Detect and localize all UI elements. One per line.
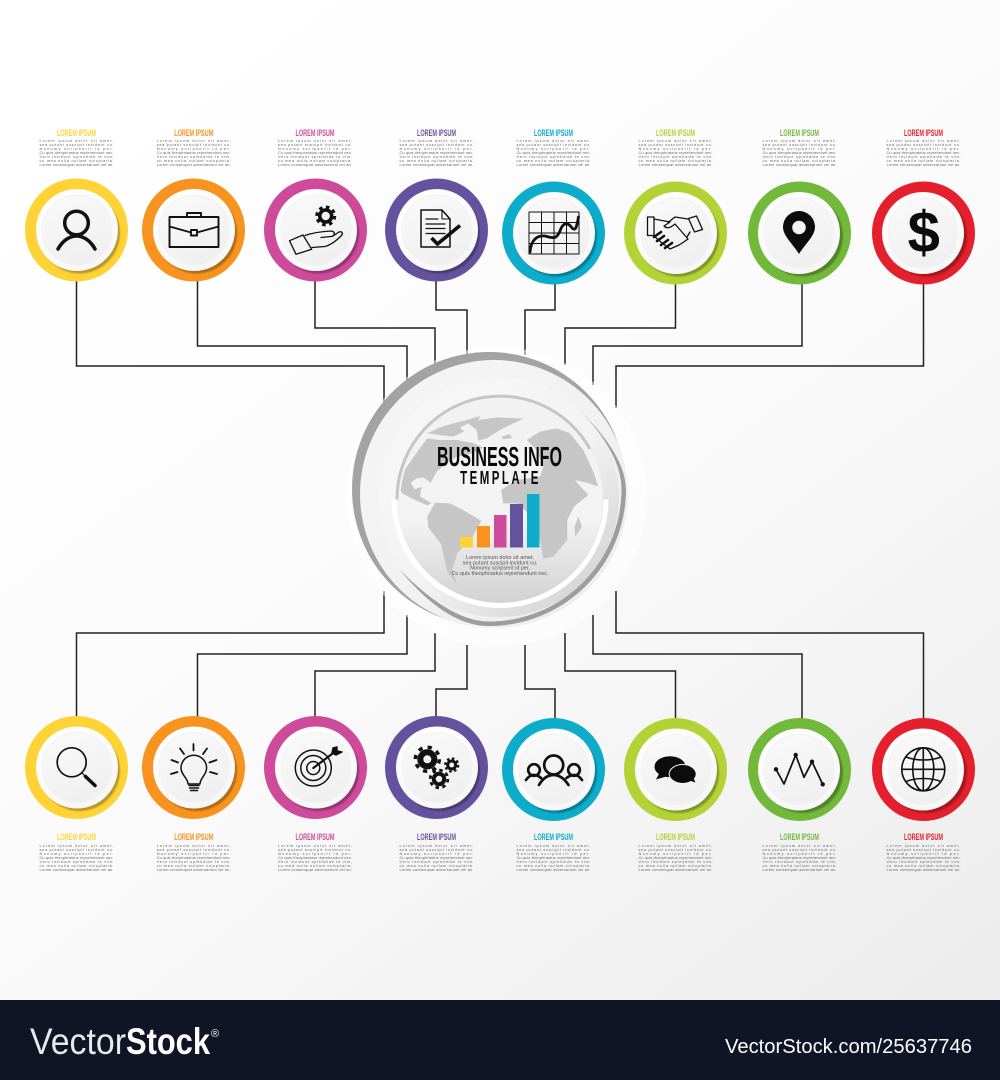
text block top 6: Nonumy scripserit id per. xyxy=(638,146,712,151)
icon: document with check xyxy=(421,210,460,247)
text block bottom 6: cu mea nulla nullam voluptaria. xyxy=(638,863,712,868)
text block top 7: Lorem ipsum dolor sit amet, xyxy=(762,138,836,143)
text block bottom 7: Nonumy scripserit id per. xyxy=(762,851,836,856)
icon: speech bubbles xyxy=(654,756,696,784)
text block bottom 7: LOREM IPSUM xyxy=(780,832,819,842)
text block top 7 xyxy=(762,128,836,167)
hub description: sea putant suscipit invidunt cu. xyxy=(462,560,538,566)
text block bottom 5: Nonumy scripserit id per. xyxy=(516,851,590,856)
text block top 1: Cu quis theophrastus reprehendunt nec. xyxy=(40,150,114,155)
badge: handshake xyxy=(624,182,727,284)
text block top 6: LOREM IPSUM xyxy=(656,128,695,138)
text block top 2: Cu quis theophrastus reprehendunt nec. xyxy=(157,150,231,155)
text block bottom 5: Lorem ipsum dolor sit amet, xyxy=(516,843,590,848)
text block top 8: Cu quis theophrastus reprehendunt nec. xyxy=(886,150,960,155)
badge: person xyxy=(25,178,128,282)
footer logo: Stock xyxy=(126,1021,210,1062)
text block top 2: LOREM IPSUM xyxy=(174,128,213,138)
icon: map pin xyxy=(783,211,815,254)
text block bottom 3: cu mea nulla nullam voluptaria. xyxy=(278,863,352,868)
icon: target with arrow xyxy=(295,747,342,786)
text block bottom 6: Lorem ipsum dolor sit amet, xyxy=(638,843,712,848)
text block bottom 2: sea putant suscipit invidunt cu. xyxy=(157,847,231,852)
text block bottom 3: Nonumy scripserit id per. xyxy=(278,851,352,856)
text block top 4 xyxy=(400,128,474,167)
text block bottom 4 xyxy=(400,832,474,872)
text block top 1: Vero invidunt splendide te vim, xyxy=(40,154,114,159)
badge: magnifier xyxy=(25,716,128,819)
text block top 7: sea putant suscipit invidunt cu. xyxy=(762,142,836,147)
text block bottom 3: LOREM IPSUM xyxy=(296,832,334,842)
text block top 8 xyxy=(886,128,960,167)
text block top 6: Vero invidunt splendide te vim, xyxy=(638,154,712,159)
text block top 1 xyxy=(40,128,114,167)
text block bottom 3: sea putant suscipit invidunt cu. xyxy=(278,847,352,852)
text block bottom 3 xyxy=(278,832,352,872)
text block bottom 8: sea putant suscipit invidunt cu. xyxy=(886,847,960,852)
badge: light bulb xyxy=(142,716,245,819)
text block top 3: Vero invidunt splendide te vim, xyxy=(278,154,352,159)
text block bottom 4: Vero invidunt splendide te vim, xyxy=(400,859,474,864)
text block bottom 7: sea putant suscipit invidunt cu. xyxy=(762,847,836,852)
text block top 3: LOREM IPSUM xyxy=(296,128,334,138)
hub description: Lorem ipsum dolor sit amet, xyxy=(466,555,535,561)
text block top 1: Nonumy scripserit id per. xyxy=(40,146,114,151)
badge: briefcase xyxy=(142,178,245,282)
footer logo xyxy=(30,1021,219,1062)
text block top 5: sea putant suscipit invidunt cu. xyxy=(516,142,590,147)
text block top 5: Lorem ipsum dolor sit amet, xyxy=(516,138,590,143)
text block bottom 3: Lorem ipsum dolor sit amet, xyxy=(278,843,352,848)
central hub xyxy=(352,350,628,634)
text block bottom 4: LOREM IPSUM xyxy=(417,832,456,842)
text block top 5: Nonumy scripserit id per. xyxy=(516,146,590,151)
text block top 2: Lorem consenquat adversarium vel an. xyxy=(157,162,231,167)
text block top 2: Nonumy scripserit id per. xyxy=(157,146,231,151)
text block top 1: Lorem consenquat adversarium vel an. xyxy=(40,162,114,167)
text block top 7: cu mea nulla nullam voluptaria. xyxy=(762,158,836,163)
icon: handshake xyxy=(648,216,702,249)
text block top 8: LOREM IPSUM xyxy=(904,128,943,138)
text block top 2: sea putant suscipit invidunt cu. xyxy=(157,142,231,147)
text block top 4: cu mea nulla nullam voluptaria. xyxy=(400,158,474,163)
text block bottom 3: Cu quis theophrastus reprehendunt nec. xyxy=(278,855,352,860)
text block bottom 8: Cu quis theophrastus reprehendunt nec. xyxy=(886,855,960,860)
text block bottom 7: cu mea nulla nullam voluptaria. xyxy=(762,863,836,868)
text block bottom 5: Lorem consenquat adversarium vel an. xyxy=(516,867,590,872)
text block bottom 1: Lorem ipsum dolor sit amet, xyxy=(40,843,114,848)
badge: speech bubbles xyxy=(624,718,727,821)
text block bottom 7 xyxy=(762,832,836,872)
text block bottom 5 xyxy=(516,832,590,872)
text block bottom 6: LOREM IPSUM xyxy=(656,832,695,842)
text block bottom 6: Nonumy scripserit id per. xyxy=(638,851,712,856)
text block bottom 8: LOREM IPSUM xyxy=(904,832,943,842)
text block bottom 2: cu mea nulla nullam voluptaria. xyxy=(157,863,231,868)
text block top 5: LOREM IPSUM xyxy=(534,128,573,138)
text block bottom 8 xyxy=(886,832,960,872)
text block bottom 7: Lorem ipsum dolor sit amet, xyxy=(762,843,836,848)
badge: chart xyxy=(502,182,605,284)
icon: gear xyxy=(317,207,335,225)
text block top 2: Lorem ipsum dolor sit amet, xyxy=(157,138,231,143)
badge: globe xyxy=(872,718,975,821)
text block bottom 1: LOREM IPSUM xyxy=(57,832,96,842)
text block top 8: Nonumy scripserit id per. xyxy=(886,146,960,151)
text block top 8: sea putant suscipit invidunt cu. xyxy=(886,142,960,147)
text block top 4: LOREM IPSUM xyxy=(417,128,456,138)
hub description: Cu quis theophrastus reprehendunt nec. xyxy=(452,571,548,577)
text block bottom 1: Nonumy scripserit id per. xyxy=(40,851,114,856)
text block top 5: Vero invidunt splendide te vim, xyxy=(516,154,590,159)
icon: light bulb xyxy=(171,744,217,790)
text block bottom 4: Lorem ipsum dolor sit amet, xyxy=(400,843,474,848)
text block top 8: Lorem ipsum dolor sit amet, xyxy=(886,138,960,143)
text block bottom 6: Cu quis theophrastus reprehendunt nec. xyxy=(638,855,712,860)
text block bottom 4: Nonumy scripserit id per. xyxy=(400,851,474,856)
text block bottom 6: Lorem consenquat adversarium vel an. xyxy=(638,867,712,872)
text block top 6: Lorem ipsum dolor sit amet, xyxy=(638,138,712,143)
title: BUSINESS INFO xyxy=(437,441,562,472)
text block bottom 2 xyxy=(157,832,231,872)
text block top 4: Lorem ipsum dolor sit amet, xyxy=(400,138,474,143)
icon: hand xyxy=(290,231,342,254)
text block bottom 1: cu mea nulla nullam voluptaria. xyxy=(40,863,114,868)
subtitle: TEMPLATE xyxy=(460,468,541,489)
text block top 4: sea putant suscipit invidunt cu. xyxy=(400,142,474,147)
text block bottom 5: sea putant suscipit invidunt cu. xyxy=(516,847,590,852)
text block bottom 1: sea putant suscipit invidunt cu. xyxy=(40,847,114,852)
icon: person xyxy=(58,211,95,249)
text block top 8: Vero invidunt splendide te vim, xyxy=(886,154,960,159)
text block top 7: Vero invidunt splendide te vim, xyxy=(762,154,836,159)
text block top 3: Cu quis theophrastus reprehendunt nec. xyxy=(278,150,352,155)
text block bottom 8: Lorem ipsum dolor sit amet, xyxy=(886,843,960,848)
text block top 3: Lorem ipsum dolor sit amet, xyxy=(278,138,352,143)
text block bottom 7: Cu quis theophrastus reprehendunt nec. xyxy=(762,855,836,860)
text block bottom 8: Vero invidunt splendide te vim, xyxy=(886,859,960,864)
text block top 6: cu mea nulla nullam voluptaria. xyxy=(638,158,712,163)
badge: hand with gear xyxy=(264,178,367,282)
text block bottom 4: Lorem consenquat adversarium vel an. xyxy=(400,867,474,872)
badge: gears xyxy=(385,716,488,819)
text block bottom 3: Lorem consenquat adversarium vel an. xyxy=(278,867,352,872)
text block bottom 8: Nonumy scripserit id per. xyxy=(886,851,960,856)
text block top 4: Vero invidunt splendide te vim, xyxy=(400,154,474,159)
text block bottom 1: Vero invidunt splendide te vim, xyxy=(40,859,114,864)
text block top 5: Cu quis theophrastus reprehendunt nec. xyxy=(516,150,590,155)
icon: gears xyxy=(415,747,458,788)
text block bottom 1: Lorem consenquat adversarium vel an. xyxy=(40,867,114,872)
bar chart xyxy=(460,494,540,548)
text block bottom 7: Vero invidunt splendide te vim, xyxy=(762,859,836,864)
text block bottom 8: cu mea nulla nullam voluptaria. xyxy=(886,863,960,868)
text block top 2: Vero invidunt splendide te vim, xyxy=(157,154,231,159)
text block top 4: Lorem consenquat adversarium vel an. xyxy=(400,162,474,167)
text block bottom 1: Cu quis theophrastus reprehendunt nec. xyxy=(40,855,114,860)
text block bottom 4: cu mea nulla nullam voluptaria. xyxy=(400,863,474,868)
icon: briefcase xyxy=(170,213,218,247)
footer logo: Vector xyxy=(30,1021,126,1062)
text block bottom 4: Cu quis theophrastus reprehendunt nec. xyxy=(400,855,474,860)
hub description: Nonumy scripserit id per. xyxy=(470,566,530,572)
text block bottom 2: Lorem ipsum dolor sit amet, xyxy=(157,843,231,848)
badge: target xyxy=(264,716,367,819)
text block top 3 xyxy=(278,128,352,167)
text block top 3: Nonumy scripserit id per. xyxy=(278,146,352,151)
text block bottom 7: Lorem consenquat adversarium vel an. xyxy=(762,867,836,872)
text block top 1: LOREM IPSUM xyxy=(57,128,96,138)
icon: line chart grid xyxy=(529,212,579,254)
text block top 8: Lorem consenquat adversarium vel an. xyxy=(886,162,960,167)
connector lines xyxy=(76,280,924,720)
text block top 5: cu mea nulla nullam voluptaria. xyxy=(516,158,590,163)
globe map xyxy=(395,416,598,585)
text block bottom 6: sea putant suscipit invidunt cu. xyxy=(638,847,712,852)
text block bottom 5: cu mea nulla nullam voluptaria. xyxy=(516,863,590,868)
text block top 6: Lorem consenquat adversarium vel an. xyxy=(638,162,712,167)
icon: magnifier xyxy=(57,748,95,786)
footer url: VectorStock.com/25637746 xyxy=(725,1036,972,1058)
footer logo: ® xyxy=(211,1028,219,1040)
text block top 5 xyxy=(516,128,590,167)
text block top 2 xyxy=(157,128,231,167)
text block top 7: Cu quis theophrastus reprehendunt nec. xyxy=(762,150,836,155)
text block bottom 1 xyxy=(40,832,114,872)
badge: people xyxy=(502,718,605,821)
text block top 2: cu mea nulla nullam voluptaria. xyxy=(157,158,231,163)
badge: map pin xyxy=(748,182,851,284)
text block top 4: Nonumy scripserit id per. xyxy=(400,146,474,151)
footer bar xyxy=(0,1000,1000,1080)
text block top 1: Lorem ipsum dolor sit amet, xyxy=(40,138,114,143)
text block top 6 xyxy=(638,128,712,167)
badge: zigzag line xyxy=(748,718,851,821)
text block top 1: sea putant suscipit invidunt cu. xyxy=(40,142,114,147)
text block top 8: cu mea nulla nullam voluptaria. xyxy=(886,158,960,163)
text block bottom 6: Vero invidunt splendide te vim, xyxy=(638,859,712,864)
text block top 3: sea putant suscipit invidunt cu. xyxy=(278,142,352,147)
text block bottom 2: Lorem consenquat adversarium vel an. xyxy=(157,867,231,872)
text block top 7: Lorem consenquat adversarium vel an. xyxy=(762,162,836,167)
text block bottom 8: Lorem consenquat adversarium vel an. xyxy=(886,867,960,872)
badge: document xyxy=(385,178,488,282)
text block top 6: Cu quis theophrastus reprehendunt nec. xyxy=(638,150,712,155)
text block top 1: cu mea nulla nullam voluptaria. xyxy=(40,158,114,163)
text block bottom 4: sea putant suscipit invidunt cu. xyxy=(400,847,474,852)
icon: wire globe xyxy=(902,748,945,791)
hub description xyxy=(452,555,548,577)
text block bottom 6 xyxy=(638,832,712,872)
icon: dollar sign: $ xyxy=(908,200,940,265)
text block bottom 2: Vero invidunt splendide te vim, xyxy=(157,859,231,864)
text block top 5: Lorem consenquat adversarium vel an. xyxy=(516,162,590,167)
text block bottom 2: LOREM IPSUM xyxy=(174,832,213,842)
text block top 3: cu mea nulla nullam voluptaria. xyxy=(278,158,352,163)
text block bottom 5: LOREM IPSUM xyxy=(534,832,573,842)
icon: people xyxy=(526,756,582,785)
text block top 4: Cu quis theophrastus reprehendunt nec. xyxy=(400,150,474,155)
badge: dollar xyxy=(872,182,975,284)
text block bottom 2: Nonumy scripserit id per. xyxy=(157,851,231,856)
text block top 7: Nonumy scripserit id per. xyxy=(762,146,836,151)
text block top 6: sea putant suscipit invidunt cu. xyxy=(638,142,712,147)
text block top 7: LOREM IPSUM xyxy=(780,128,819,138)
text block bottom 5: Vero invidunt splendide te vim, xyxy=(516,859,590,864)
text block bottom 5: Cu quis theophrastus reprehendunt nec. xyxy=(516,855,590,860)
text block bottom 3: Vero invidunt splendide te vim, xyxy=(278,859,352,864)
text block top 3: Lorem consenquat adversarium vel an. xyxy=(278,162,352,167)
icon: zigzag line xyxy=(774,753,825,786)
text block bottom 2: Cu quis theophrastus reprehendunt nec. xyxy=(157,855,231,860)
